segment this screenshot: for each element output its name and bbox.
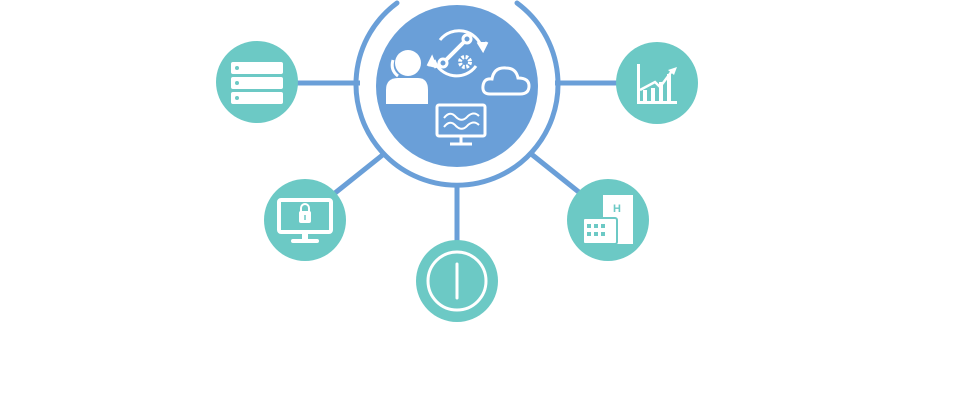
satellite: hospital: H	[613, 203, 621, 215]
icon: maintenance cycle	[428, 31, 487, 76]
connector lines	[297, 83, 617, 242]
satellite: growth chart	[616, 42, 698, 124]
icon: cloud	[483, 68, 529, 94]
central hub	[356, 3, 558, 185]
icon: monitor with waves	[437, 105, 485, 144]
satellite: power	[416, 240, 498, 322]
satellite: secure monitor	[264, 179, 346, 261]
icon: support person	[386, 50, 428, 104]
satellite: server	[216, 41, 298, 123]
satellite: hospital	[567, 179, 649, 261]
